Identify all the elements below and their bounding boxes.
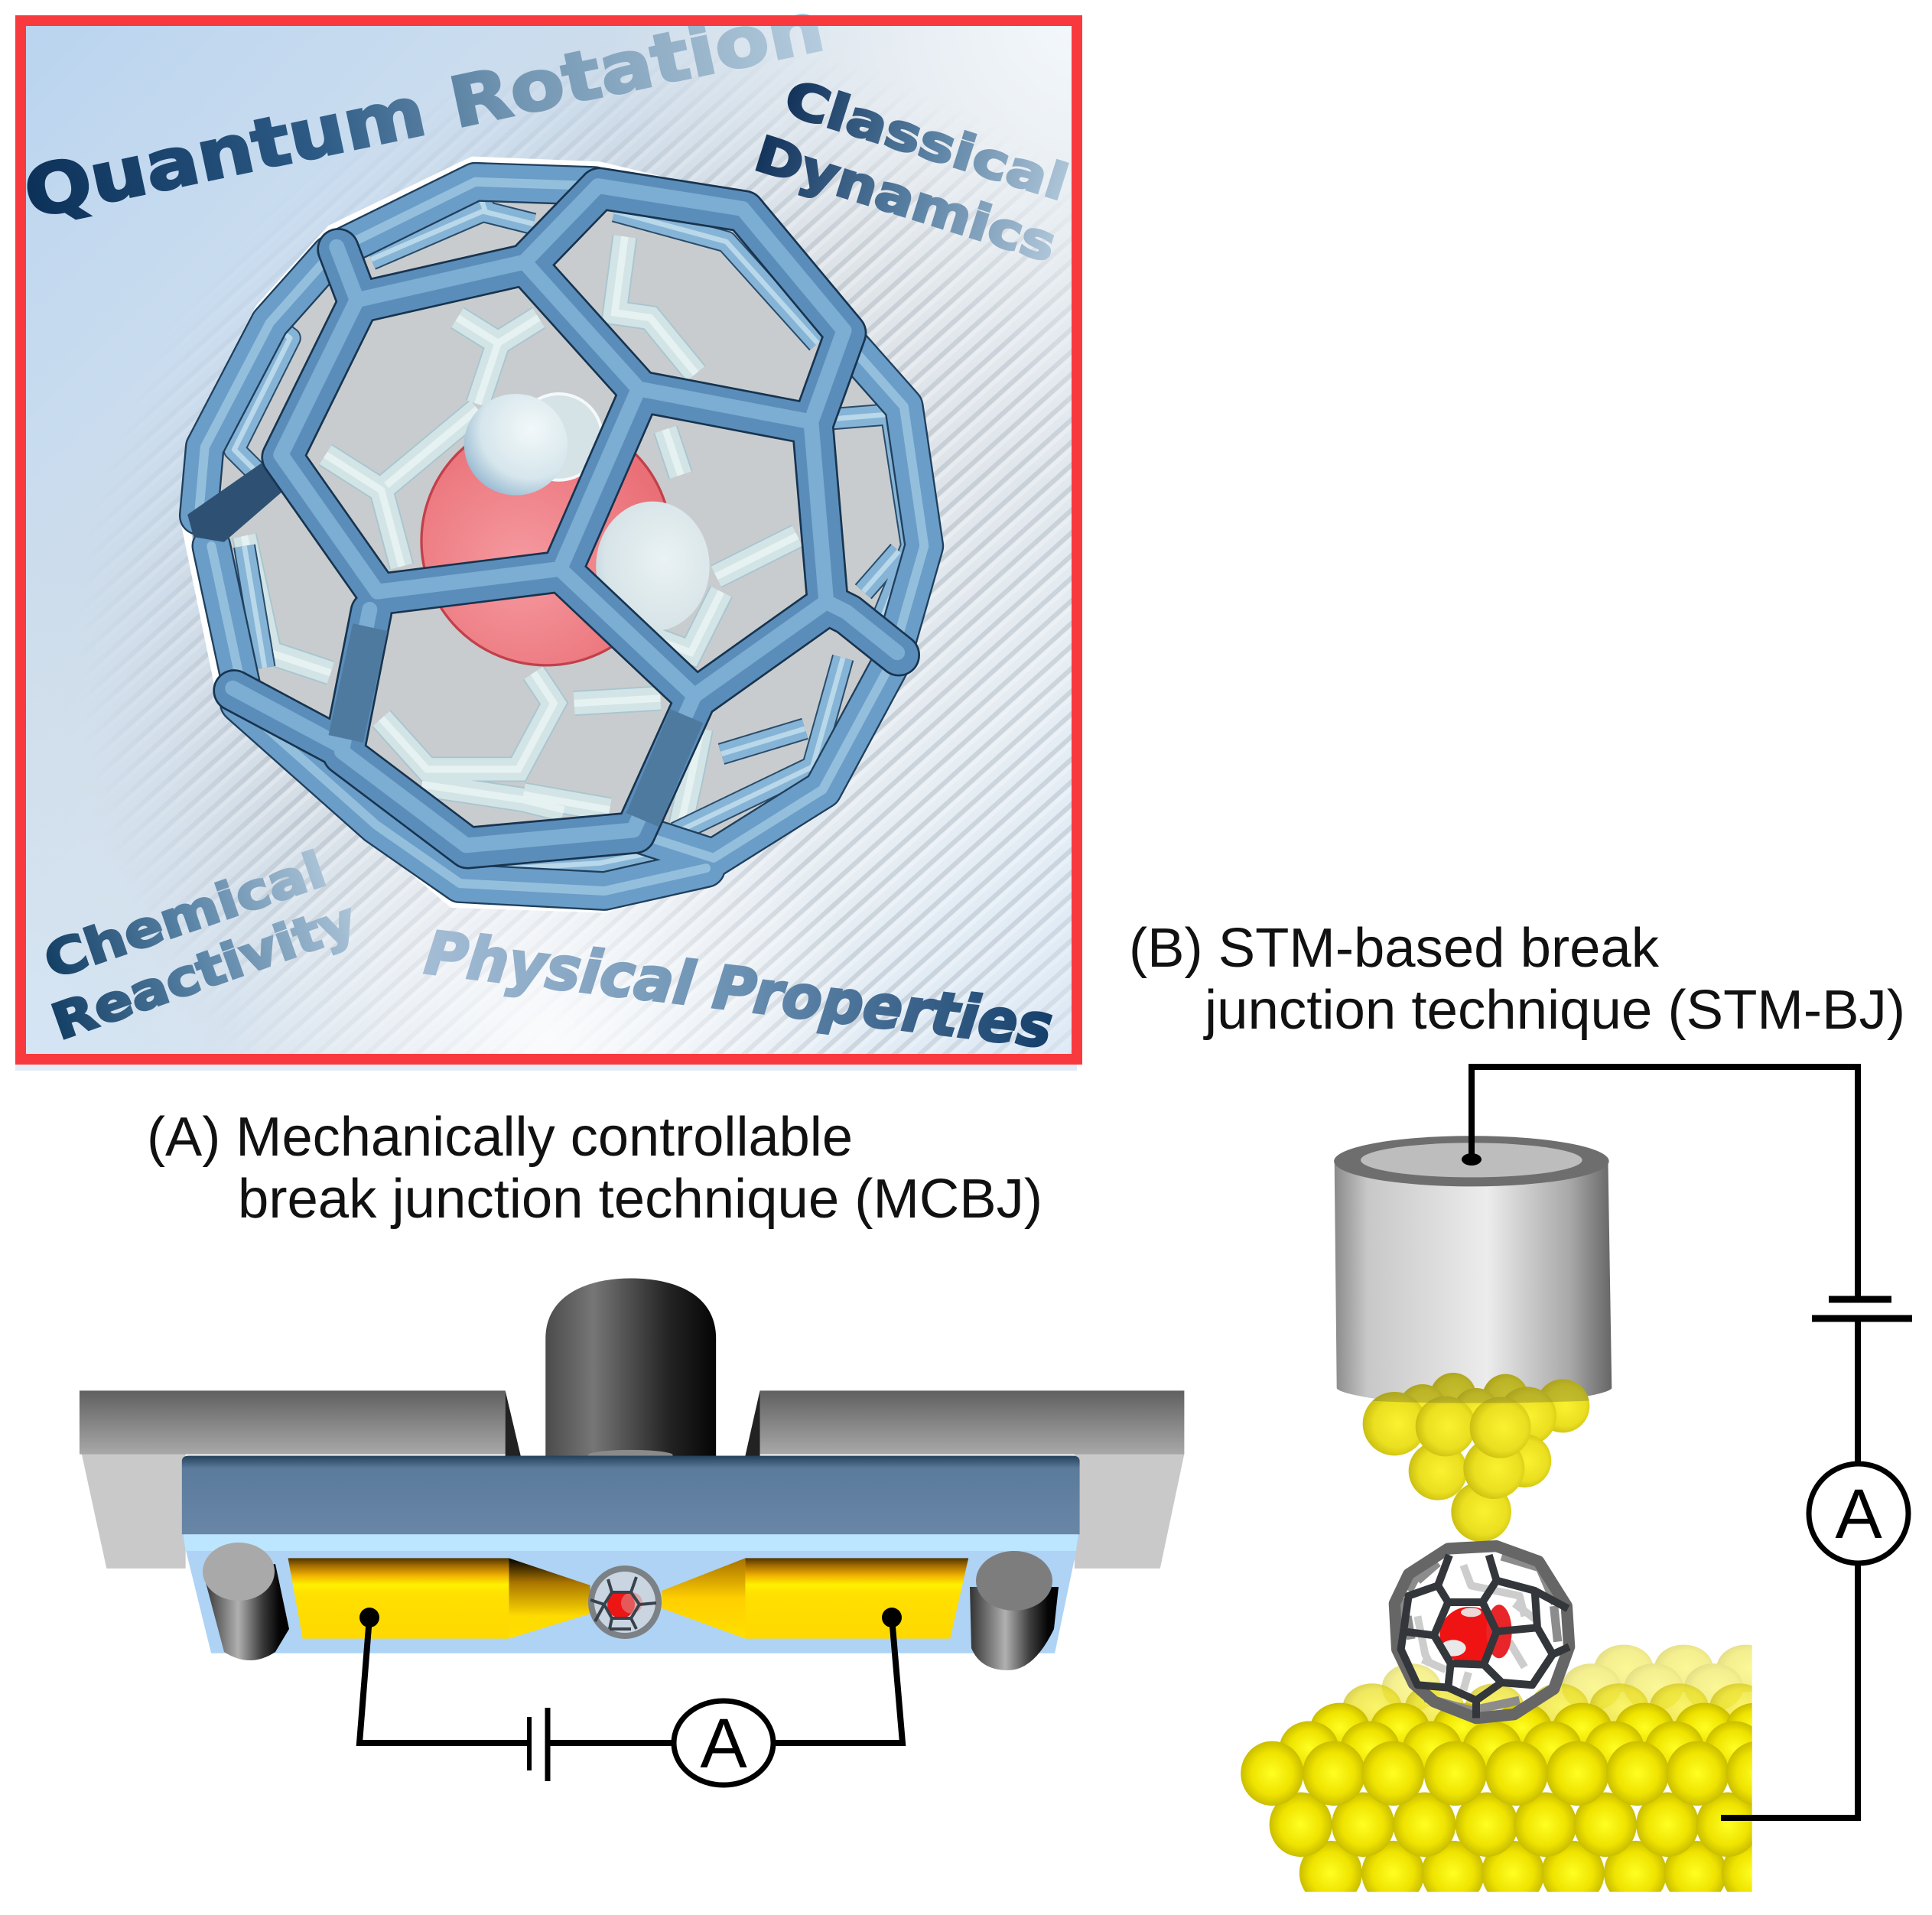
circuit: STM wiring (1462, 1067, 1912, 1818)
red frame (21, 21, 1077, 1059)
diagram: MCBJ apparatus (80, 1279, 1184, 1670)
heading: Dynamics: Dynamics (748, 126, 1063, 274)
battery symbol (529, 1708, 548, 1781)
apparatus body (80, 1279, 1184, 1653)
light blue substrate (182, 1534, 1080, 1653)
water molecule (421, 394, 710, 665)
circuit: MCBJ wiring (359, 1608, 903, 1785)
wire to battery (359, 1618, 529, 1743)
right cylinder post (970, 1551, 1059, 1670)
inner grey bonds (1402, 1556, 1558, 1711)
cylinder shadow over tip atoms (1372, 1373, 1589, 1403)
cage interior (184, 161, 937, 909)
ammeter (1809, 1464, 1908, 1563)
outer ring bonds (199, 182, 924, 891)
back bonds (1417, 1565, 1535, 1690)
left cylinder post (203, 1543, 289, 1660)
left contact dot (359, 1608, 379, 1627)
ammeter: A (1835, 1475, 1882, 1553)
label: technique B: (B) STM-based break (1129, 918, 1660, 979)
left grey support (80, 1390, 521, 1569)
water molecule (1439, 1605, 1512, 1664)
fullerene with water on surface (1394, 1546, 1569, 1718)
ammeter (674, 1701, 773, 1785)
dark shaded bond (187, 461, 284, 542)
wire to ammeter (1855, 1318, 1861, 1464)
front cage bonds (233, 186, 899, 848)
dark lower bonds (346, 627, 687, 820)
diagram: STM break junction (1241, 1136, 1789, 1905)
label: technique B: junction technique (STM-BJ) (1203, 980, 1905, 1041)
wire from ammeter (773, 1618, 903, 1743)
fullerene cage with trapped water molecule (184, 161, 937, 909)
label: technique A: (A) Mechanically controllable (147, 1107, 853, 1168)
front gold surface rows (1241, 1721, 1752, 1892)
wire to gold substrate (1721, 1563, 1858, 1818)
heading: Physical Properties: Physical Properties (421, 918, 1056, 1062)
inner ring bonds (234, 182, 912, 871)
tip contact dot (1462, 1153, 1482, 1166)
panel: quantum rotation cover image (15, 0, 1077, 1071)
heading: Chemical: Chemical (37, 841, 333, 990)
gold tip cluster (1363, 1373, 1589, 1542)
front dark bonds (1401, 1555, 1569, 1718)
heading: Classical: Classical (778, 70, 1075, 212)
panel background (15, 21, 1077, 1071)
small fullerene (590, 1569, 659, 1636)
heading: Reactivity: Reactivity (45, 892, 363, 1052)
label: technique A: break junction technique (MCBJ) (238, 1169, 1042, 1230)
ammeter: A (700, 1705, 747, 1783)
back cage bonds (244, 236, 797, 825)
battery symbol (1812, 1299, 1912, 1318)
heading: Quantum Rotation: Quantum Rotation (18, 0, 831, 235)
wire from tip to battery (1472, 1067, 1858, 1299)
left gold electrode (288, 1558, 590, 1639)
back gold surface rows (1310, 1645, 1785, 1752)
push rod (545, 1279, 716, 1460)
wire to ammeter (548, 1740, 674, 1746)
right grey support (745, 1390, 1184, 1569)
outer grey bonds (1394, 1546, 1569, 1718)
substrate bar (182, 1455, 1080, 1534)
STM tip cylinder (1334, 1136, 1612, 1406)
right gold electrode (662, 1558, 968, 1639)
right contact dot (882, 1608, 902, 1627)
